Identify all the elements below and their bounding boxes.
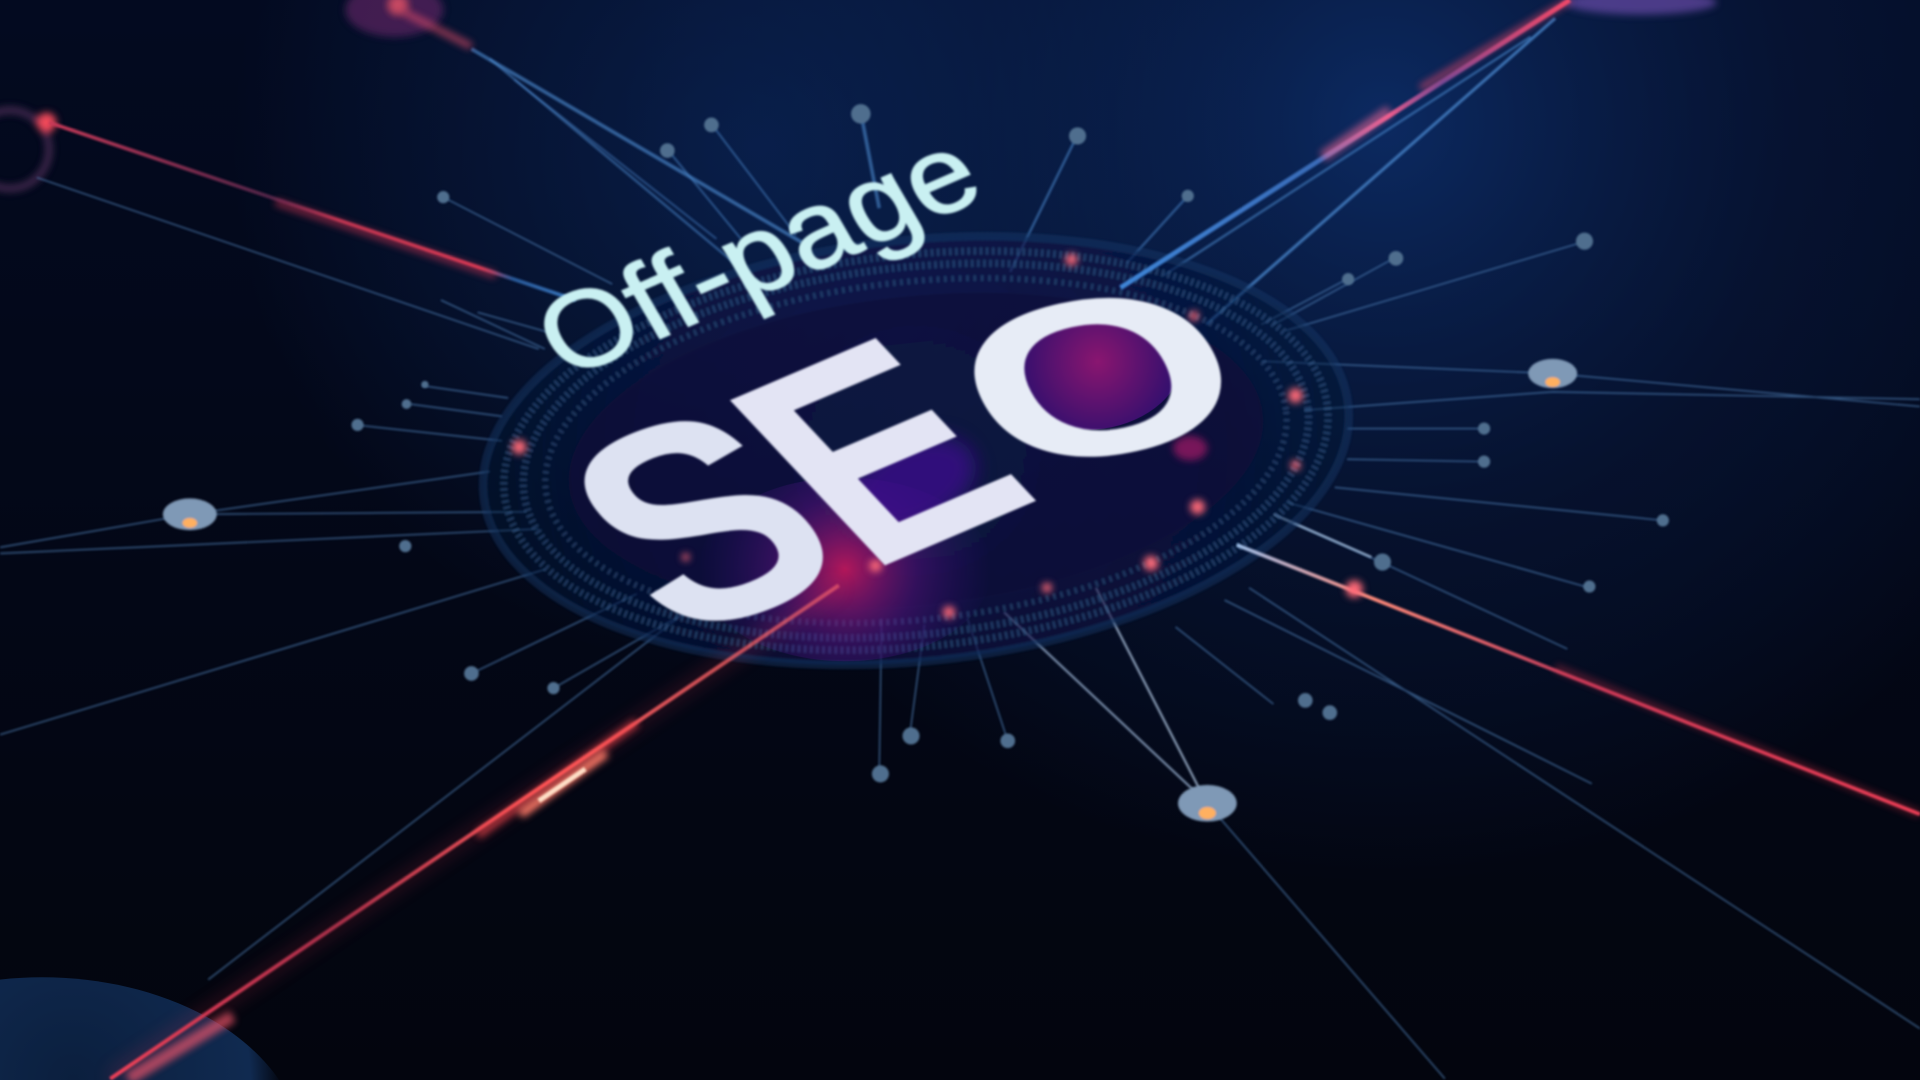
node: right bbox=[1528, 359, 1577, 388]
letter E: E bbox=[664, 280, 1095, 625]
node: left bbox=[163, 498, 217, 530]
hub glow bbox=[698, 295, 1207, 661]
bottom-left dome bbox=[0, 977, 279, 1080]
glowing sparks bbox=[512, 253, 1363, 618]
title: Off-page: Off-page bbox=[515, 108, 1000, 400]
network nodes bbox=[163, 104, 1669, 822]
small dots bbox=[351, 104, 1669, 782]
corner nodes bbox=[0, 0, 1717, 189]
node: bottom bbox=[1178, 785, 1237, 822]
bright blue beams bbox=[471, 18, 1555, 802]
letter S: S bbox=[503, 345, 900, 696]
title: SEO bbox=[503, 232, 1288, 696]
letter O: O bbox=[908, 232, 1288, 522]
hub platform bbox=[462, 196, 1370, 706]
